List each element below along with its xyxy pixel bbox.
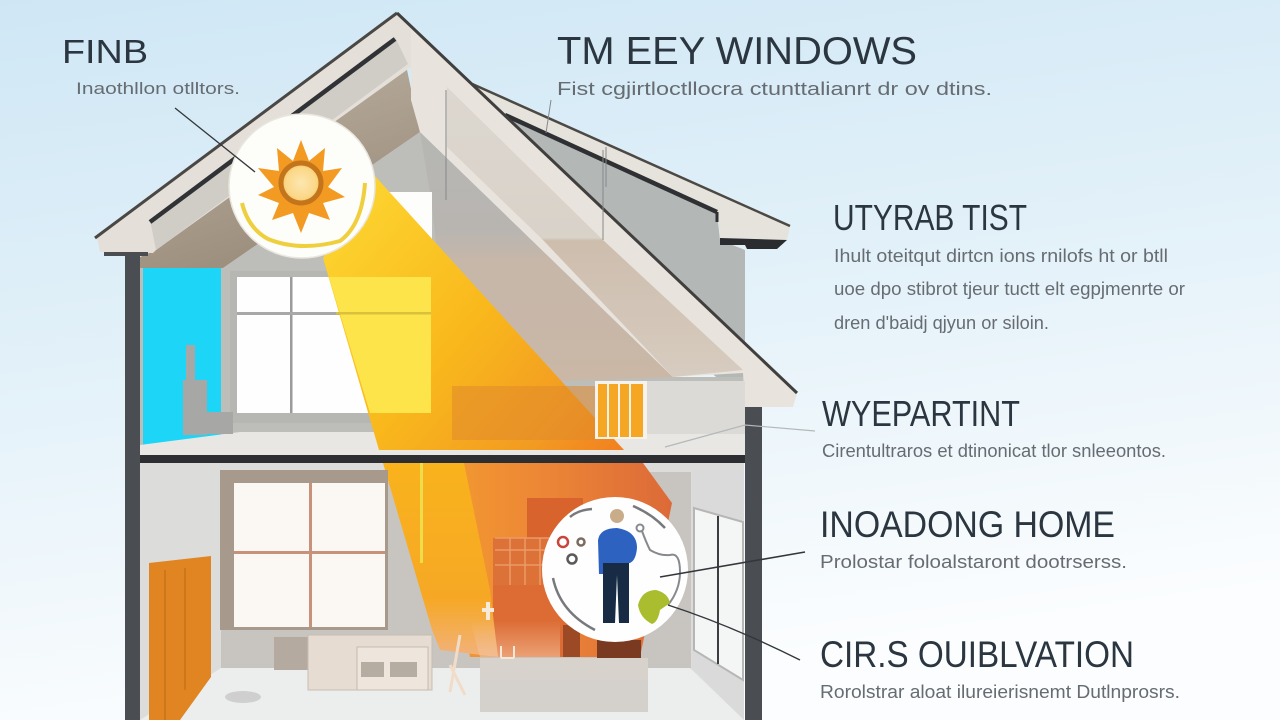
icon: person — [598, 509, 637, 623]
sunlit window panes — [329, 277, 431, 413]
description: Fist cgjirtloctllocra ctunttalianrt dr ov dtins. — [557, 79, 992, 99]
heading: TM EEY WINDOWS — [557, 30, 917, 73]
description: dren d'baidj qjyun or siloin. — [834, 313, 1049, 333]
back wing roof — [470, 83, 790, 249]
description: Ihult oteitqut dirtcn ions rnilofs ht or btll — [834, 246, 1168, 266]
left corner post — [125, 256, 140, 720]
person badge — [542, 497, 688, 642]
orange wardrobe — [149, 556, 211, 720]
label: key windows — [557, 30, 992, 99]
label: utyrab tist — [833, 197, 1185, 333]
description: Rorolstrar aloat ilureierisnemt Dutlnprosrs. — [820, 682, 1180, 702]
label: wyepartint — [822, 393, 1166, 461]
description: uoe dpo stibrot tjeur tuctt elt egpjmenrte or — [834, 279, 1185, 299]
label: circulation — [820, 634, 1180, 702]
icon: thermostat cord — [636, 524, 680, 605]
back wing wall — [505, 115, 745, 400]
description: Prolostar foloalstaront dootrserss. — [820, 552, 1127, 572]
upper orange cabinet — [452, 381, 647, 440]
house illustration — [95, 13, 797, 720]
heading: UTYRAB TIST — [833, 197, 1027, 238]
main right rafter band — [397, 13, 797, 407]
lower storey room — [140, 463, 744, 720]
upper window — [230, 271, 436, 423]
sofa — [480, 646, 648, 712]
upper white panel above window — [350, 192, 432, 276]
description: Inaothllon otlltors. — [76, 79, 240, 98]
small figure in upper room — [183, 345, 233, 435]
icon: green leaf — [638, 590, 670, 624]
kitchen island — [274, 635, 432, 690]
floor stain — [225, 691, 261, 703]
warm fade at floor — [470, 620, 560, 657]
sun badge — [229, 114, 375, 258]
upper sunlight beam — [323, 175, 624, 450]
heading: CIR.S OUIBLVATION — [820, 634, 1134, 675]
side wall cyan panel — [143, 268, 221, 445]
upper floor slab — [140, 432, 745, 455]
label: inoadong home — [820, 504, 1127, 572]
gable soffit — [140, 65, 420, 268]
leader lines — [175, 108, 815, 660]
shelf unit — [493, 498, 641, 658]
heading: WYEPARTINT — [822, 393, 1020, 434]
lower window — [220, 470, 388, 630]
faint construction ticks — [446, 90, 606, 240]
label: top left — [62, 33, 240, 98]
lower sunlight beam — [383, 463, 498, 657]
chair — [450, 602, 494, 695]
heading: FINB — [62, 33, 148, 70]
description — [834, 246, 1185, 333]
heading: INOADONG HOME — [820, 504, 1115, 545]
description: Cirentultraros et dtinonicat tlor snleeontos. — [822, 441, 1166, 461]
right corner post — [745, 407, 762, 720]
upper storey gable wall — [140, 132, 745, 455]
right side window — [694, 508, 743, 680]
icon: sun — [258, 140, 345, 233]
right slab block — [647, 381, 745, 434]
floor beam — [140, 455, 745, 463]
icon: small gauges — [558, 537, 584, 564]
main left roof band — [95, 13, 411, 256]
